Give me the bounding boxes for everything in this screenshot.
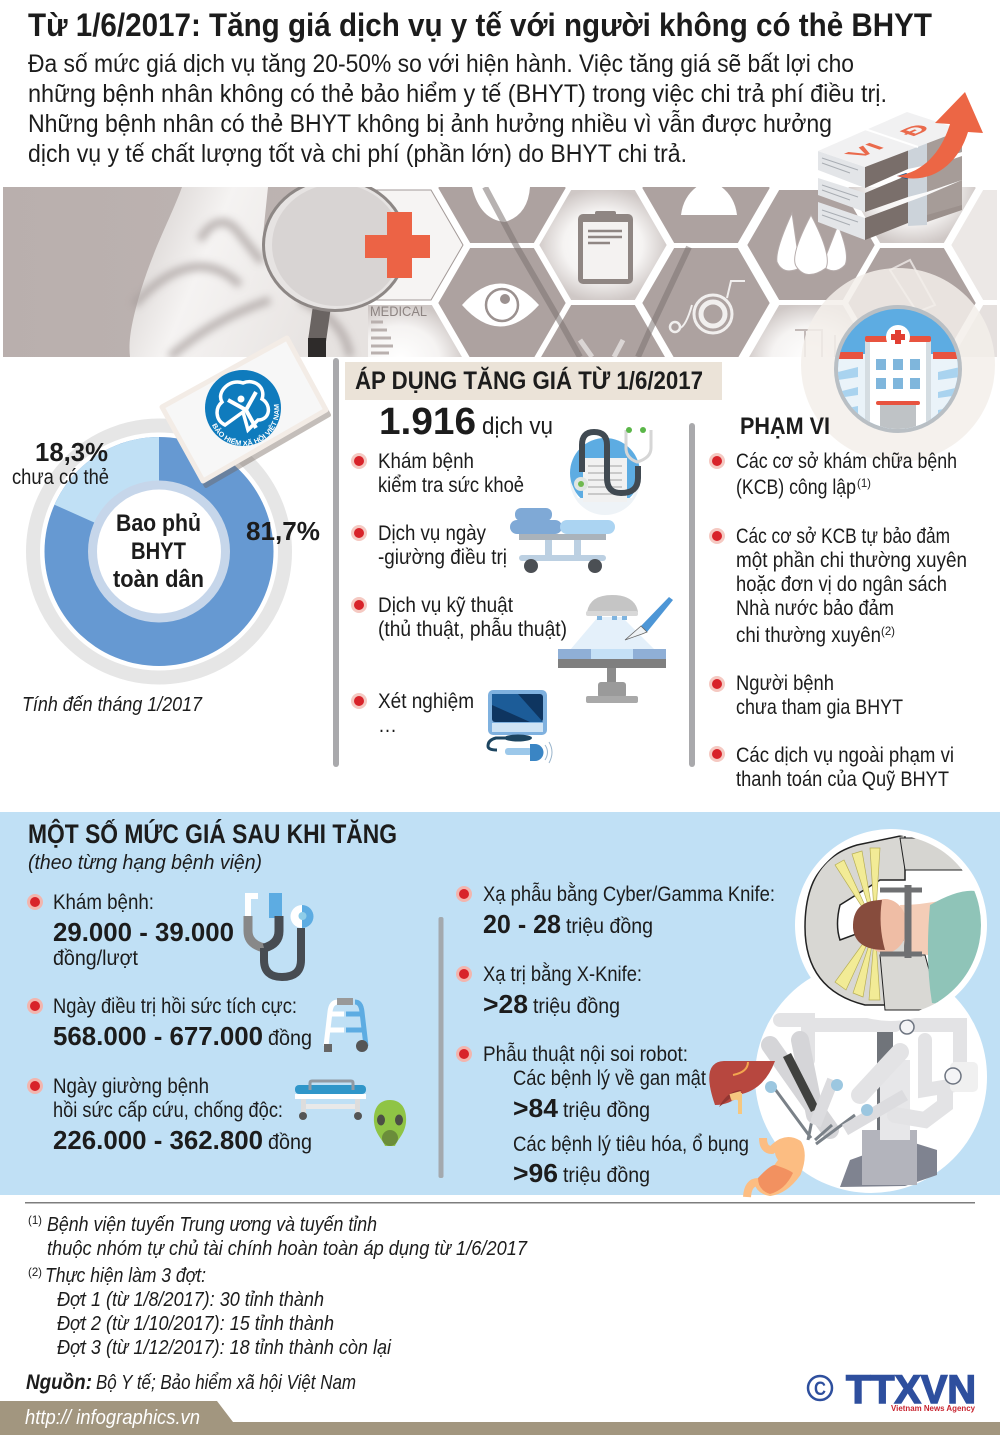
price: x-knife: Xạ trị bằng X-Knife: — [483, 963, 642, 986]
footnotes: Thực hiện làm 3 đợt: — [45, 1265, 206, 1287]
source: Bộ Y tế; Bảo hiểm xã hội Việt Nam — [96, 1372, 356, 1394]
price: robot surgery: Các bệnh lý tiêu hóa, ổ bụng — [513, 1133, 749, 1156]
money label: Đ: Đ — [893, 122, 937, 139]
price: x-knife: triệu đồng — [533, 995, 620, 1018]
icon: record and stethoscope — [570, 427, 651, 515]
price: emergency bed: đồng — [268, 1131, 312, 1154]
panel: coverage donut — [12, 336, 331, 716]
icon: operating table — [558, 595, 673, 703]
intro text — [28, 50, 887, 168]
prices heading: MỘT SỐ MỨC GIÁ SAU KHI TĂNG — [28, 817, 397, 849]
price: robot surgery: Các bệnh lý về gan mật — [513, 1067, 706, 1090]
donut centre text: Bao phủ — [116, 510, 201, 537]
syringe and flasks — [795, 260, 935, 357]
scope item 4: Các dịch vụ ngoài phạm vi — [736, 744, 954, 767]
price: x-knife — [456, 963, 642, 1019]
date note: Tính đến tháng 1/2017 — [22, 694, 203, 716]
price: intensive care — [27, 995, 312, 1051]
icon: water drops — [777, 213, 846, 275]
price: examination: Khám bệnh: — [53, 891, 154, 914]
icon: stethoscope — [245, 893, 314, 977]
price: cyber knife — [456, 883, 775, 939]
price: intensive care: 568.000 - 677.000 — [53, 1021, 263, 1051]
footnotes: Đợt 2 (từ 1/10/2017): 15 tỉnh thành — [57, 1313, 334, 1335]
intro text: những bệnh nhân không có thẻ bảo hiểm y tế (BHYT) trong việc chi trả phí điều trị. — [28, 80, 887, 108]
panel: scope — [709, 413, 967, 791]
item: tests: Xét nghiệm — [378, 690, 474, 713]
price: emergency bed: Ngày giường bệnh — [53, 1075, 209, 1098]
scope item 2: chi thường xuyên — [736, 624, 881, 647]
panel: services — [345, 362, 722, 763]
footnotes — [28, 1213, 528, 1359]
icon: gas mask — [374, 1100, 406, 1146]
scope item 2: (2) — [881, 624, 895, 638]
panel: prices — [0, 812, 1000, 1197]
intro text: Những bệnh nhân có thẻ BHYT không bị ảnh hưởng nhiều vì vẫn được hưởng — [28, 109, 832, 138]
item: exam: Khám bệnh — [378, 450, 474, 473]
icon: ultrasound monitor — [488, 690, 552, 763]
price: cyber knife: 20 - 28 — [483, 909, 561, 939]
logo: TTXVN: TTXVN — [846, 1368, 976, 1412]
prices subheading: (theo từng hạng bệnh viện) — [28, 852, 262, 874]
logo: BẢO HIỂM XÃ HỘI VIỆT NAM — [212, 404, 280, 446]
banner text: medical: MEDICAL — [370, 303, 427, 319]
source — [26, 1371, 356, 1394]
scope item 3 — [709, 672, 903, 719]
red cross — [365, 212, 430, 278]
price: robot surgery: triệu đồng — [563, 1099, 650, 1122]
scope item 4: thanh toán của Quỹ BHYT — [736, 768, 949, 791]
scope item 1: (1) — [857, 476, 871, 490]
icon: money stack with rising arrow — [818, 92, 983, 240]
icon: liver — [709, 1061, 775, 1114]
stethoscope tubes — [485, 187, 689, 357]
scope item 2: Các cơ sở KCB tự bảo đảm — [736, 525, 950, 548]
money layer 3 — [818, 180, 962, 240]
divider middle — [689, 423, 695, 767]
price: robot surgery: triệu đồng — [563, 1164, 650, 1187]
scope item 1: (KCB) công lập — [736, 476, 856, 499]
price: robot surgery: >84 — [513, 1093, 559, 1123]
footer bar — [0, 1401, 1000, 1435]
footnotes: Đợt 3 (từ 1/12/2017): 18 tỉnh thành còn lại — [57, 1337, 392, 1359]
scope item 1 — [709, 450, 957, 499]
price: robot surgery: Phẫu thuật nội soi robot: — [483, 1043, 688, 1066]
price: intensive care: đồng — [268, 1027, 312, 1050]
icon: stretcher — [295, 1081, 366, 1120]
logo: TTXVN: Vietnam News Agency — [891, 1403, 975, 1413]
money layer 1 — [818, 112, 962, 188]
icon: clipboard — [578, 211, 633, 284]
scope item 1: Các cơ sở khám chữa bệnh — [736, 450, 957, 473]
label: 81,7%: 81,7% — [246, 516, 320, 546]
icon: dome and leaf — [472, 187, 737, 222]
item: exam — [351, 450, 524, 497]
donut centre text — [113, 510, 204, 593]
title: Từ 1/6/2017: Tăng giá dịch vụ y tế với người không có thẻ BHYT — [28, 7, 932, 43]
footnotes: (2) — [28, 1265, 42, 1279]
price: intensive care: Ngày điều trị hồi sức tích cực: — [53, 995, 297, 1018]
item: day bed — [351, 522, 507, 569]
insurance card — [160, 336, 331, 488]
scope item 3: chưa tham gia BHYT — [736, 696, 903, 719]
stethoscope lens — [262, 187, 398, 357]
scope item 2 — [709, 525, 967, 647]
price: emergency bed: hồi sức cấp cứu, chống độc: — [53, 1099, 283, 1122]
item: exam: kiểm tra sức khoẻ — [378, 474, 524, 497]
price: emergency bed — [27, 1075, 312, 1155]
service count: 1.916 — [379, 401, 476, 443]
heading: scope: PHẠM VI — [740, 413, 830, 440]
icon: walker — [324, 998, 368, 1052]
scope item 2: Nhà nước bảo đảm — [736, 597, 894, 620]
heading band — [345, 362, 722, 400]
item: tests — [351, 690, 474, 737]
item: day bed: Dịch vụ ngày — [378, 522, 486, 545]
footnotes: Bệnh viện tuyến Trung ương và tuyến tỉnh — [47, 1214, 377, 1236]
donut centre text: BHYT — [131, 538, 186, 565]
heading band: ÁP DỤNG TĂNG GIÁ TỪ 1/6/2017 — [355, 365, 703, 395]
service count: dịch vụ — [482, 413, 553, 440]
hospital halo — [801, 268, 995, 462]
scope item 2: một phần chi thường xuyên — [736, 549, 967, 572]
source: Nguồn: — [26, 1371, 92, 1394]
item: technique — [351, 594, 567, 641]
service count — [379, 401, 553, 443]
price: examination: đồng/lượt — [53, 947, 138, 970]
price: emergency bed: 226.000 - 362.800 — [53, 1125, 263, 1155]
donut chart — [33, 426, 285, 678]
hand — [129, 187, 368, 357]
item: technique: Dịch vụ kỹ thuật — [378, 594, 513, 617]
donut centre text: toàn dân — [113, 566, 204, 593]
item: technique: (thủ thuật, phẫu thuật) — [378, 618, 567, 641]
divider prices — [438, 917, 444, 1178]
icon: bed — [510, 508, 615, 573]
price: cyber knife: Xạ phẫu bằng Cyber/Gamma Knife: — [483, 883, 775, 906]
illustration: gamma knife — [795, 829, 987, 1021]
price: robot surgery — [456, 1043, 749, 1188]
divider left — [333, 358, 339, 767]
label: 18,3%: 18,3% — [35, 437, 108, 467]
footer bar: http:// infographics.vn — [25, 1407, 200, 1429]
scope item 3: Người bệnh — [736, 672, 834, 695]
scope item 2: hoặc đơn vị do ngân sách — [736, 573, 947, 596]
footnotes: (1) — [28, 1213, 42, 1227]
money layer 2 — [818, 156, 962, 212]
price: examination — [27, 891, 234, 970]
illustration: surgical robot — [755, 961, 987, 1193]
footnotes: thuộc nhóm tự chủ tài chính hoàn toàn áp dụng từ 1/6/2017 — [47, 1238, 528, 1260]
price: robot surgery: >96 — [513, 1158, 558, 1188]
logo: TTXVN: C — [814, 1379, 826, 1400]
intro text: Đa số mức giá dịch vụ tăng 20-50% so với hiện hành. Việc tăng giá sẽ bất lợi cho — [28, 50, 854, 78]
label: no card: chưa có thẻ — [12, 466, 109, 489]
logo — [205, 370, 281, 446]
price: cyber knife: triệu đồng — [566, 915, 653, 938]
icon: hospital — [834, 305, 962, 435]
icon: stomach — [747, 1138, 801, 1197]
footnote rule — [25, 1202, 975, 1204]
icon: eye — [462, 284, 539, 326]
price: examination: 29.000 - 39.000 — [53, 917, 234, 947]
banner: medical hexagons photo — [3, 187, 997, 357]
item: tests: … — [378, 714, 397, 737]
intro text: dịch vụ y tế chất lượng tốt và chi phí (phần lớn) do BHYT chi trả. — [28, 140, 687, 168]
icon: wheelchair — [670, 281, 745, 333]
footnotes: Đợt 1 (từ 1/8/2017): 30 tỉnh thành — [57, 1289, 324, 1311]
price: x-knife: >28 — [483, 989, 528, 1019]
item: day bed: -giường điều trị — [378, 546, 507, 569]
money label: VI: VI — [839, 140, 890, 161]
scope item 4 — [709, 744, 954, 791]
